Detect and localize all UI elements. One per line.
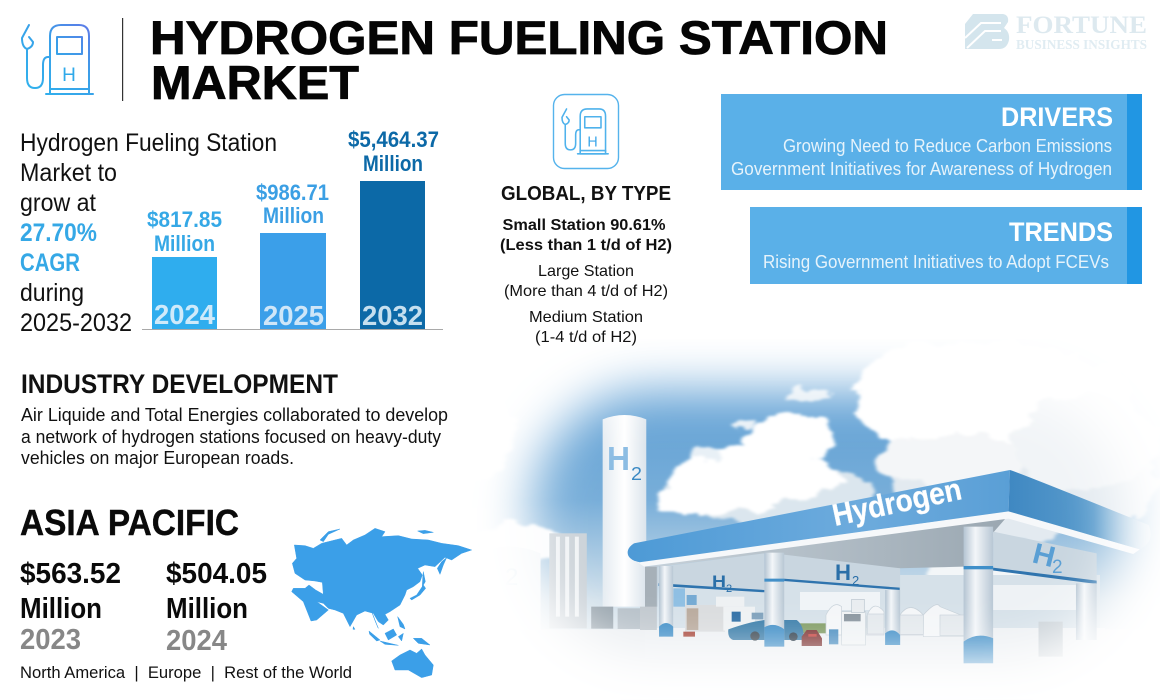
asia pacific heading: ASIA PACIFIC <box>20 502 239 543</box>
logo: Fortune Business Insights <box>965 12 1147 52</box>
fascia stripes <box>659 564 1097 592</box>
bar 2032: $5,464.37 <box>348 127 439 152</box>
dark machinery <box>640 567 657 630</box>
global by type: Medium Station <box>529 309 643 326</box>
panel: trends: TRENDS <box>1009 217 1113 247</box>
global by type: Large Station <box>538 263 634 280</box>
sky behind canopy <box>657 575 1100 630</box>
H2 logos: H <box>607 440 630 477</box>
map: Asia Pacific <box>292 528 472 678</box>
global by type: (1-4 t/d of H2) <box>535 329 637 346</box>
blue dispenser <box>829 629 838 644</box>
other regions: North America | Europe | Rest of the World <box>20 663 352 682</box>
H2 logos: H <box>1029 538 1058 574</box>
logo: Fortune Business Insights: FORTUNE <box>1016 12 1147 39</box>
bar 2032: 2032 <box>362 300 423 331</box>
fascia panels <box>657 532 1097 593</box>
left faded tank <box>510 558 540 606</box>
value 2023 <box>20 558 121 656</box>
industry development text: Air Liquide and Total Energies collaborated to develop <box>21 405 448 425</box>
value 2024: $504.05 <box>166 558 267 590</box>
value 2023: 2023 <box>20 624 81 656</box>
tanker trucks <box>826 605 965 637</box>
clouds <box>500 352 1153 575</box>
value 2023: $563.52 <box>20 558 121 590</box>
H2 logos: 2 <box>726 583 732 595</box>
header divider <box>122 18 123 101</box>
bar 2024: $817.85 <box>147 207 222 232</box>
CAGR text block: 2025-2032 <box>20 309 132 337</box>
global by type: (More than 4 t/d of H2) <box>504 283 668 300</box>
CAGR text block <box>20 129 277 337</box>
field <box>800 623 830 633</box>
panel: drivers: Growing Need to Reduce Carbon Emissions <box>783 136 1112 156</box>
bar 2032 <box>348 127 439 331</box>
bar 2025 <box>256 180 329 331</box>
industry development text: vehicles on major European roads. <box>21 448 294 468</box>
CAGR text block: Market to <box>20 159 117 187</box>
industry development text <box>21 405 448 468</box>
panel: trends: Rising Government Initiatives to Adopt FCEVs <box>763 252 1109 272</box>
canopy lettering: Hydrogen <box>829 471 965 533</box>
icon: hydrogen pump: H <box>62 65 76 86</box>
storage tower <box>603 415 646 607</box>
value 2024 <box>166 558 267 657</box>
bar 2032: Million <box>363 151 423 176</box>
bar 2025: $986.71 <box>256 180 329 205</box>
value 2024: Million <box>166 593 248 625</box>
H2 logos: H <box>712 572 726 591</box>
red car <box>802 630 822 646</box>
CAGR text block: Hydrogen Fueling Station <box>20 129 277 157</box>
rear H2 sign <box>673 588 697 607</box>
CAGR text block: grow at <box>20 189 96 217</box>
logo: Fortune Business Insights: BUSINESS INSIGHTS <box>1016 37 1147 52</box>
canopy side face <box>1008 470 1130 546</box>
front column <box>964 527 993 663</box>
far dispenser <box>1039 622 1063 657</box>
icon: hydrogen pump <box>22 25 93 94</box>
H2 logos: 2 <box>852 573 859 588</box>
bar 2024 <box>147 207 222 330</box>
icon: type badge: H <box>587 135 598 151</box>
canopy columns <box>659 553 1097 647</box>
grey cold box <box>549 533 587 628</box>
CAGR text block: during <box>20 279 84 307</box>
rear building <box>683 597 763 637</box>
CAGR text block: CAGR <box>20 249 80 277</box>
global by type: Small Station 90.61% <box>502 217 666 234</box>
bar 2024: Million <box>154 231 215 256</box>
value 2024: 2024 <box>166 625 227 657</box>
photo: hydrogen fueling station <box>497 352 1157 664</box>
panel: drivers: Government Initiatives for Awareness of Hydrogen <box>731 159 1112 179</box>
CAGR text block: 27.70% <box>20 219 97 247</box>
ceiling <box>648 519 1005 568</box>
station forecourt scene <box>640 567 965 646</box>
icon: type badge <box>554 94 618 168</box>
panel: trends <box>750 207 1142 284</box>
global by type: (Less than 1 t/d of H2) <box>500 237 672 254</box>
title: MARKET <box>151 56 359 109</box>
H2 logos: 2 <box>505 564 518 591</box>
industry development heading: INDUSTRY DEVELOPMENT <box>21 369 338 399</box>
blue car <box>728 620 804 641</box>
value 2023: Million <box>20 593 102 625</box>
H2 logos <box>609 447 1062 592</box>
title: HYDROGEN FUELING STATION <box>150 11 888 64</box>
ground <box>589 630 645 640</box>
bar 2025: Million <box>263 203 324 228</box>
bar 2025: 2025 <box>263 300 324 331</box>
panel: drivers <box>721 94 1142 190</box>
global by type: GLOBAL, BY TYPE <box>501 183 671 205</box>
title <box>150 11 888 109</box>
industry development text: a network of hydrogen stations focused on heavy-duty <box>21 427 441 447</box>
H2 logos: H <box>835 560 851 585</box>
plant machinery <box>591 567 657 629</box>
H2 logos: 2 <box>1052 557 1063 578</box>
canopy front face <box>628 470 1010 562</box>
H2 logos: 2 <box>631 464 642 484</box>
bar 2024: 2024 <box>154 299 215 330</box>
panel: drivers: DRIVERS <box>1001 102 1113 132</box>
bar chart: market size <box>142 127 443 331</box>
main dispenser <box>842 599 866 645</box>
global by type <box>500 183 672 346</box>
canopy white rim <box>637 511 1140 567</box>
